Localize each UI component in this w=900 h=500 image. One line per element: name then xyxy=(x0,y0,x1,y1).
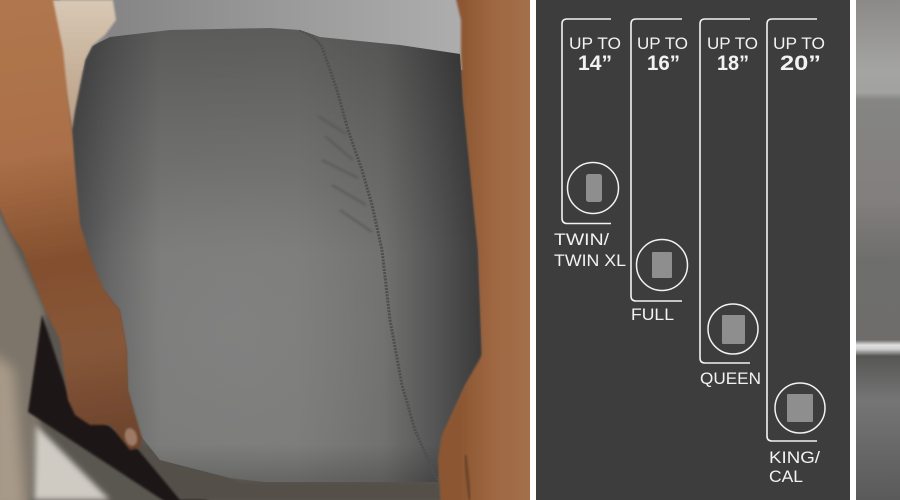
panel: sheet sizes xyxy=(536,0,850,500)
size column: twin / twin xl, up to 14 inches xyxy=(554,19,626,270)
size column: king / cal, up to 20 inches: KING/ xyxy=(769,449,820,467)
size column: queen, up to 18 inches xyxy=(700,19,761,388)
size column: full, up to 16 inches xyxy=(631,19,688,324)
size column: twin / twin xl, up to 14 inches: 14” xyxy=(578,52,612,75)
mattress underside xyxy=(136,447,208,500)
fingernail xyxy=(123,427,139,447)
right forearm xyxy=(454,0,530,358)
size column: king / cal, up to 20 inches xyxy=(767,19,825,486)
mattress with grey fitted sheet xyxy=(60,20,490,500)
size column: king / cal, up to 20 inches: CAL xyxy=(769,468,803,486)
wrinkles xyxy=(318,116,372,232)
photo: cropped mattress edge at right xyxy=(856,0,900,500)
size column: queen, up to 18 inches: QUEEN xyxy=(700,370,761,388)
size column: twin / twin xl, up to 14 inches: UP TO xyxy=(569,35,621,53)
cream sleeve xyxy=(50,0,116,130)
size column: full, up to 16 inches: 16” xyxy=(647,52,680,75)
size column: queen, up to 18 inches: UP TO xyxy=(707,35,758,53)
size column: king / cal, up to 20 inches: UP TO xyxy=(773,35,825,53)
white bedding xyxy=(34,425,110,500)
size column: twin / twin xl, up to 14 inches: TWIN/ xyxy=(554,231,609,249)
photo background xyxy=(0,0,530,500)
size column: full, up to 16 inches: FULL xyxy=(631,306,674,324)
size column: full, up to 16 inches: UP TO xyxy=(637,35,688,53)
right hand xyxy=(437,354,496,500)
size column: twin / twin xl, up to 14 inches: TWIN XL xyxy=(554,252,626,270)
bedding below left arm xyxy=(0,195,45,500)
size column: king / cal, up to 20 inches: 20” xyxy=(780,52,821,75)
dark shadow gap xyxy=(28,315,220,500)
seam xyxy=(300,30,437,480)
size column: queen, up to 18 inches: 18” xyxy=(717,52,749,75)
left forearm and hand xyxy=(0,0,142,450)
photo: hands fitting a grey sheet over a mattress corner xyxy=(0,0,535,500)
